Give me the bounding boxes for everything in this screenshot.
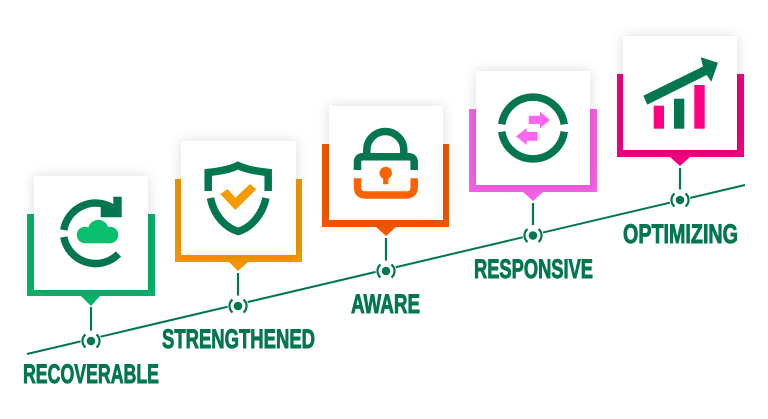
stem and node <box>80 307 102 352</box>
panel: recoverable <box>23 176 159 389</box>
panel: aware <box>322 106 449 319</box>
bracket and pointer <box>617 74 744 166</box>
white card <box>329 106 443 220</box>
panel: strengthened <box>162 141 315 354</box>
icon: exchange arrows in circle <box>502 97 564 159</box>
bracket and pointer <box>469 109 597 201</box>
bracket and pointer <box>27 214 155 306</box>
white card <box>181 141 296 255</box>
panel: responsive <box>469 71 597 284</box>
label: AWARE <box>351 289 420 319</box>
label: STRENGTHENED <box>162 324 315 354</box>
panel: optimizing <box>617 36 744 249</box>
bracket and pointer <box>175 179 302 271</box>
label: RECOVERABLE <box>23 359 159 389</box>
stem and node <box>228 273 248 316</box>
icon: rising bar chart with arrow <box>643 57 718 129</box>
bracket and pointer <box>322 144 449 236</box>
stem and node <box>522 203 544 246</box>
icon: shield with check <box>208 166 268 232</box>
white card <box>476 71 590 185</box>
label: RESPONSIVE <box>474 254 593 284</box>
stem and node <box>670 168 690 210</box>
rising timeline line <box>27 185 745 354</box>
white card <box>623 36 737 150</box>
icon: padlock <box>358 132 414 195</box>
icon: cloud recovery cycle <box>64 197 122 264</box>
stem and node <box>376 238 396 282</box>
white card <box>34 176 148 290</box>
